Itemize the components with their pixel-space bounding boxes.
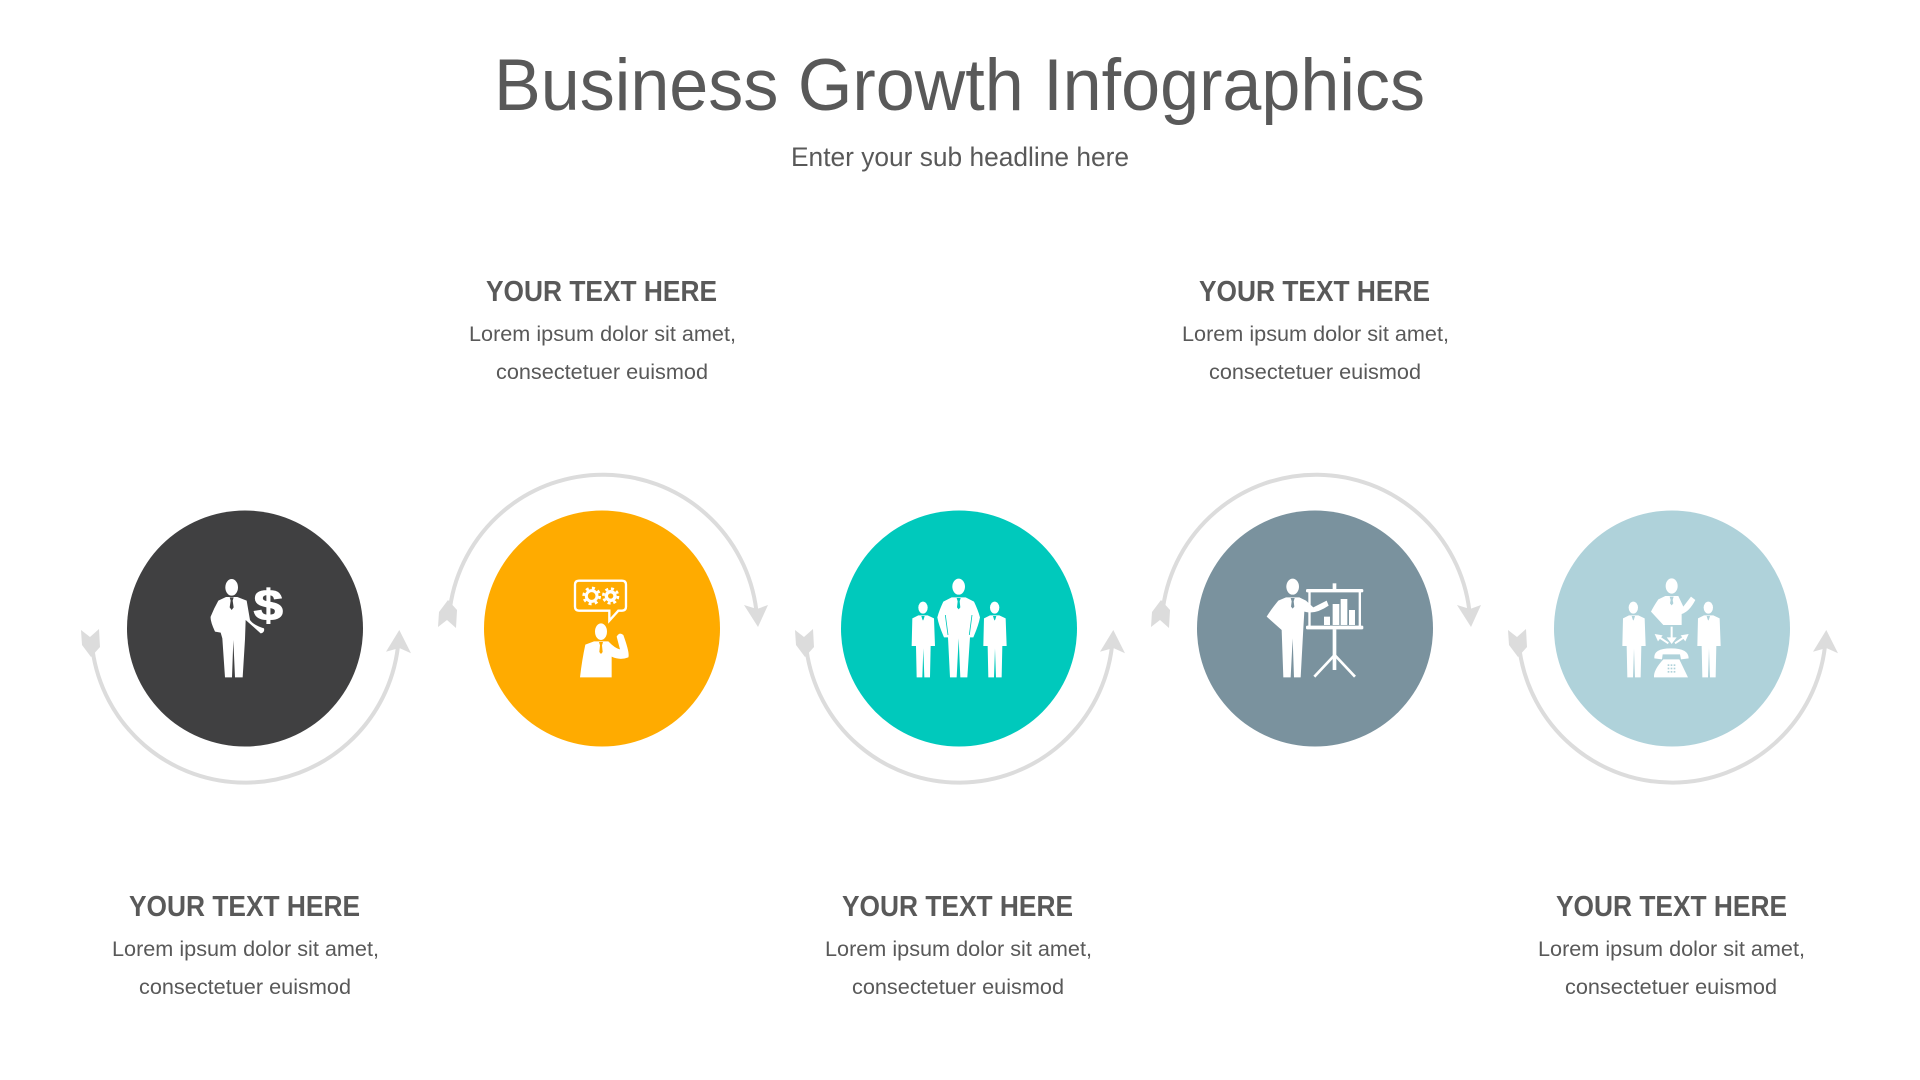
step 3 text [825,891,1092,999]
circle 1 [127,510,363,746]
arc arrow 1 [81,629,411,783]
icon: presenter with chart board [1267,579,1363,677]
title: Business Growth Infographics [494,45,1425,126]
step 5 text [1538,891,1805,999]
body 2 line 2: consectetuer euismod [496,361,708,384]
body 5 line 2: consectetuer euismod [1565,976,1777,999]
heading 1: YOUR TEXT HERE [129,891,360,923]
body 3: Lorem ipsum dolor sit amet, [825,938,1092,961]
body 4: Lorem ipsum dolor sit amet, [1182,323,1449,346]
step 3: circle with arrows [795,510,1125,783]
circle 2 [484,510,720,746]
heading 2: YOUR TEXT HERE [486,276,717,308]
arc arrow 2 [438,475,768,628]
body 1 line 2: consectetuer euismod [139,976,351,999]
step 2 text [469,276,736,384]
circle 3 [841,510,1077,746]
body 3 line 2: consectetuer euismod [852,976,1064,999]
heading 4: YOUR TEXT HERE [1199,276,1430,308]
circle 5 [1554,510,1790,746]
arc arrow 3 [795,629,1125,783]
body 5: Lorem ipsum dolor sit amet, [1538,938,1805,961]
body 4 line 2: consectetuer euismod [1209,361,1421,384]
icon: person with gears speech bubble [575,581,629,677]
step 4 text [1182,276,1449,384]
icon: businessman with dollar [211,579,283,677]
arc arrow 4 [1151,475,1481,628]
body 1: Lorem ipsum dolor sit amet, [112,938,379,961]
body 2: Lorem ipsum dolor sit amet, [469,323,736,346]
step 1: circle with arrows [81,510,411,783]
icon: team with telephone [1622,578,1721,677]
heading 5: YOUR TEXT HERE [1556,891,1787,923]
step 1 text [112,891,379,999]
arc arrow 5 [1508,629,1838,783]
subtitle: Enter your sub headline here [791,142,1129,172]
step 4: circle with arrows [1151,475,1481,746]
icon: businessman with dollar: $ [254,582,283,630]
icon: three businessmen [912,579,1007,677]
heading 3: YOUR TEXT HERE [842,891,1073,923]
circle 4 [1197,510,1433,746]
step 2: circle with arrows [438,475,768,746]
step 5: circle with arrows [1508,510,1838,783]
